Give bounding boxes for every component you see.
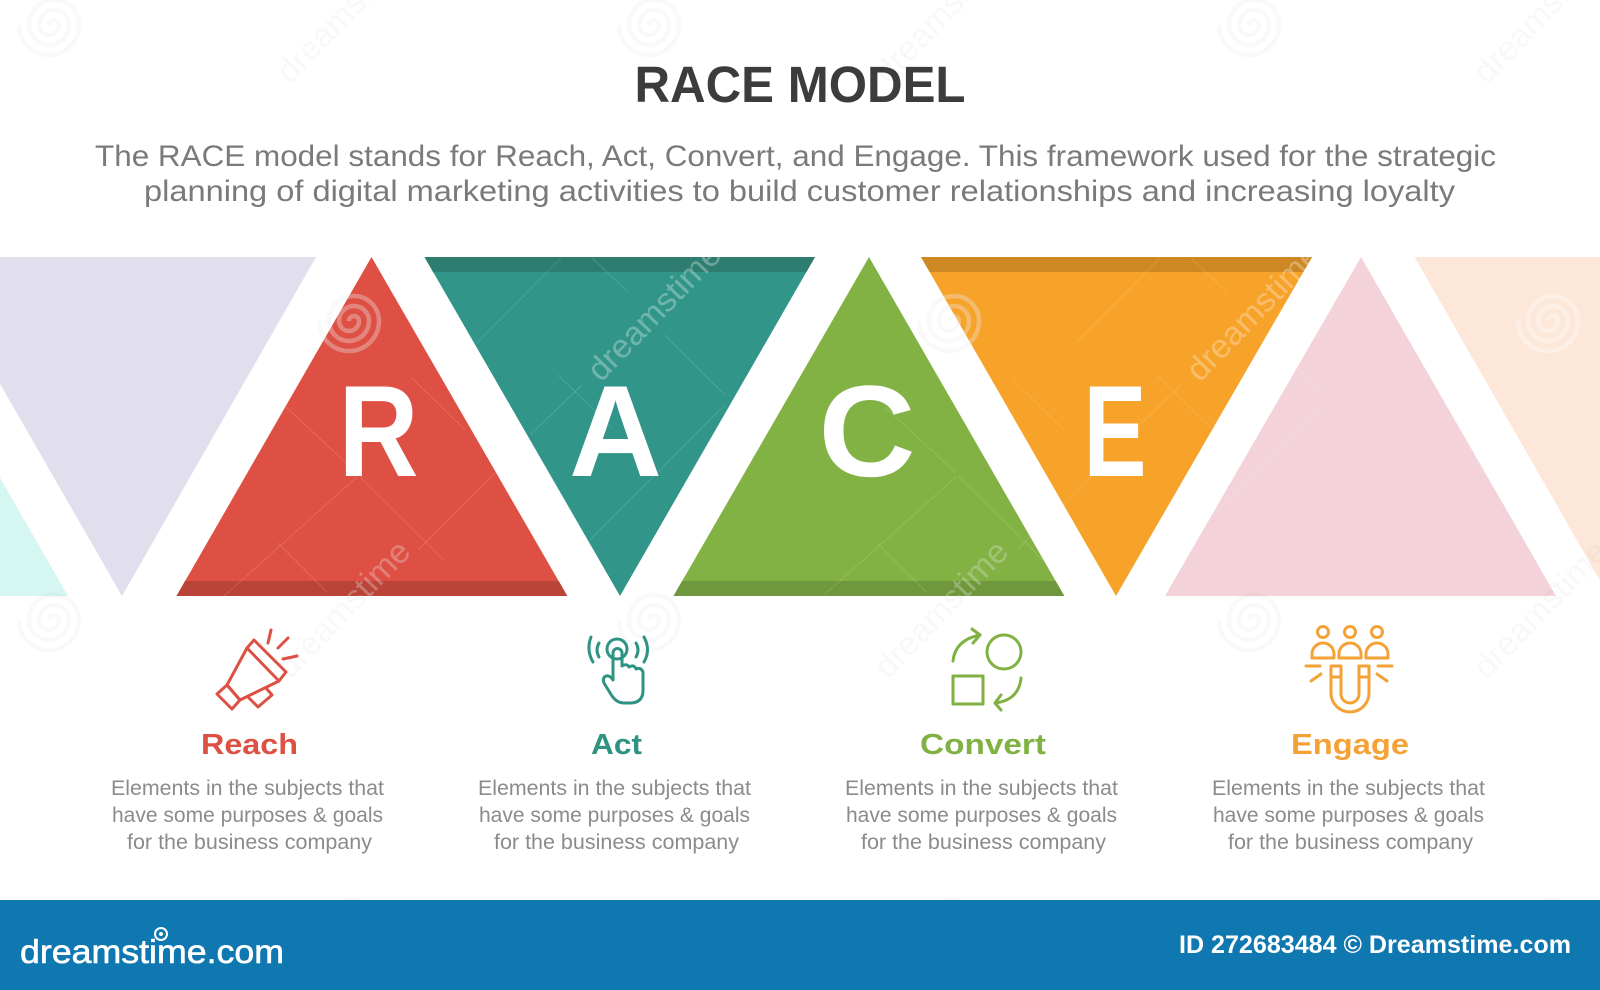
column: Reach: have some purposes & goals bbox=[112, 804, 383, 827]
column: Reach: for the business company bbox=[127, 831, 373, 854]
column: Reach: Elements in the subjects that bbox=[111, 777, 384, 800]
triangle: E engage: E bbox=[1084, 358, 1146, 504]
icon: touch hand bbox=[589, 637, 648, 703]
triangle: C convert bbox=[674, 257, 1064, 596]
column: Act: Act bbox=[591, 729, 642, 761]
subtitle text block: planning of digital marketing activities to build customer relationships and increasing loyalty bbox=[144, 175, 1455, 208]
column: Convert: have some purposes & goals bbox=[846, 804, 1117, 827]
footer bar: ID 272683484 © Dreamstime.com bbox=[1179, 931, 1571, 959]
faded triangle: lavender bbox=[0, 257, 316, 596]
triangle: E engage bbox=[921, 257, 1312, 596]
triangle: C convert: C bbox=[818, 358, 916, 504]
icon: convert shapes bbox=[953, 629, 1021, 710]
column: Convert bbox=[845, 729, 1118, 854]
column: Engage: Engage bbox=[1291, 729, 1409, 761]
watermark: dreamstime bbox=[866, 533, 1015, 685]
triangle: A act: A bbox=[569, 358, 662, 504]
triangle: R reach: R bbox=[338, 358, 418, 504]
icon: megaphone bbox=[217, 630, 297, 709]
footer bar bbox=[0, 900, 1600, 990]
column: Act: have some purposes & goals bbox=[479, 804, 750, 827]
column: Engage: have some purposes & goals bbox=[1213, 804, 1484, 827]
footer bar: dreamstime.com bbox=[20, 933, 284, 970]
watermark: dreamstime bbox=[579, 236, 728, 388]
subtitle text block bbox=[95, 140, 1496, 208]
triangle band bbox=[0, 257, 1600, 596]
watermark: dreamstime bbox=[1178, 236, 1327, 388]
column: Convert: Elements in the subjects that bbox=[845, 777, 1118, 800]
watermark: dreamstime bbox=[268, 533, 417, 685]
triangle: R reach bbox=[176, 257, 567, 596]
column: Convert: for the business company bbox=[861, 831, 1107, 854]
faded triangle: peach bbox=[1414, 257, 1600, 596]
column: Reach: Reach bbox=[201, 729, 298, 761]
column: Engage: for the business company bbox=[1228, 831, 1474, 854]
watermark: dreamstime bbox=[268, 533, 417, 685]
column: Reach bbox=[111, 729, 384, 854]
column: Act: for the business company bbox=[494, 831, 740, 854]
triangle: A act bbox=[424, 257, 815, 596]
faded triangle: pink bbox=[1165, 257, 1556, 596]
column: Act bbox=[478, 729, 751, 854]
watermark: dreamstime bbox=[866, 533, 1015, 685]
subtitle text block: The RACE model stands for Reach, Act, Convert, and Engage. This framework used for the strategic bbox=[95, 140, 1496, 173]
faded triangle: mint bbox=[0, 478, 68, 596]
column: Engage: Elements in the subjects that bbox=[1212, 777, 1485, 800]
column: Convert: Convert bbox=[920, 729, 1046, 761]
column: Engage bbox=[1212, 729, 1485, 854]
icon: people magnet bbox=[1306, 626, 1392, 712]
title: RACE MODEL bbox=[634, 56, 966, 113]
column: Act: Elements in the subjects that bbox=[478, 777, 751, 800]
